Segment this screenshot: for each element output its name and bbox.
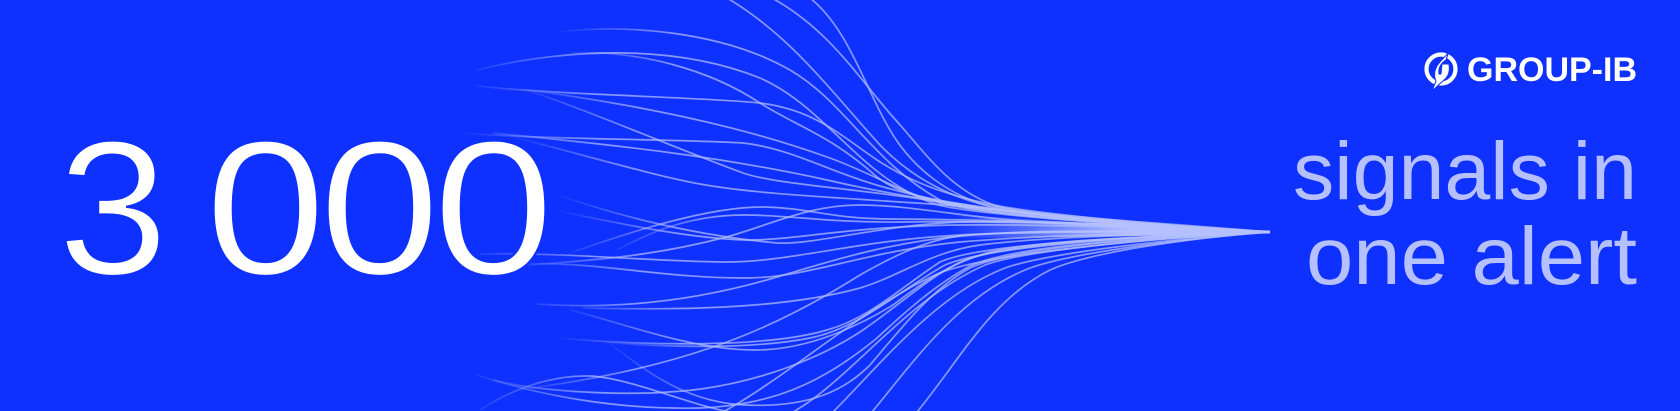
tagline line 1: signals in xyxy=(1293,126,1637,217)
digit 0: 0 xyxy=(433,102,554,315)
logo icon xyxy=(1426,48,1456,91)
digit 0: 0 xyxy=(205,102,326,315)
logo: Group-IB xyxy=(1426,48,1637,91)
fan: merged signal beam xyxy=(950,214,1270,238)
big number xyxy=(58,102,554,315)
digit 3: 3 xyxy=(58,102,168,315)
chart: signal lines converging into one alert xyxy=(460,0,1270,411)
tagline line 2: one alert xyxy=(1306,211,1637,302)
logo wordmark: GROUP-IB xyxy=(1467,51,1637,89)
digit 0: 0 xyxy=(319,102,440,315)
tagline: signals in one alert xyxy=(1293,126,1637,302)
